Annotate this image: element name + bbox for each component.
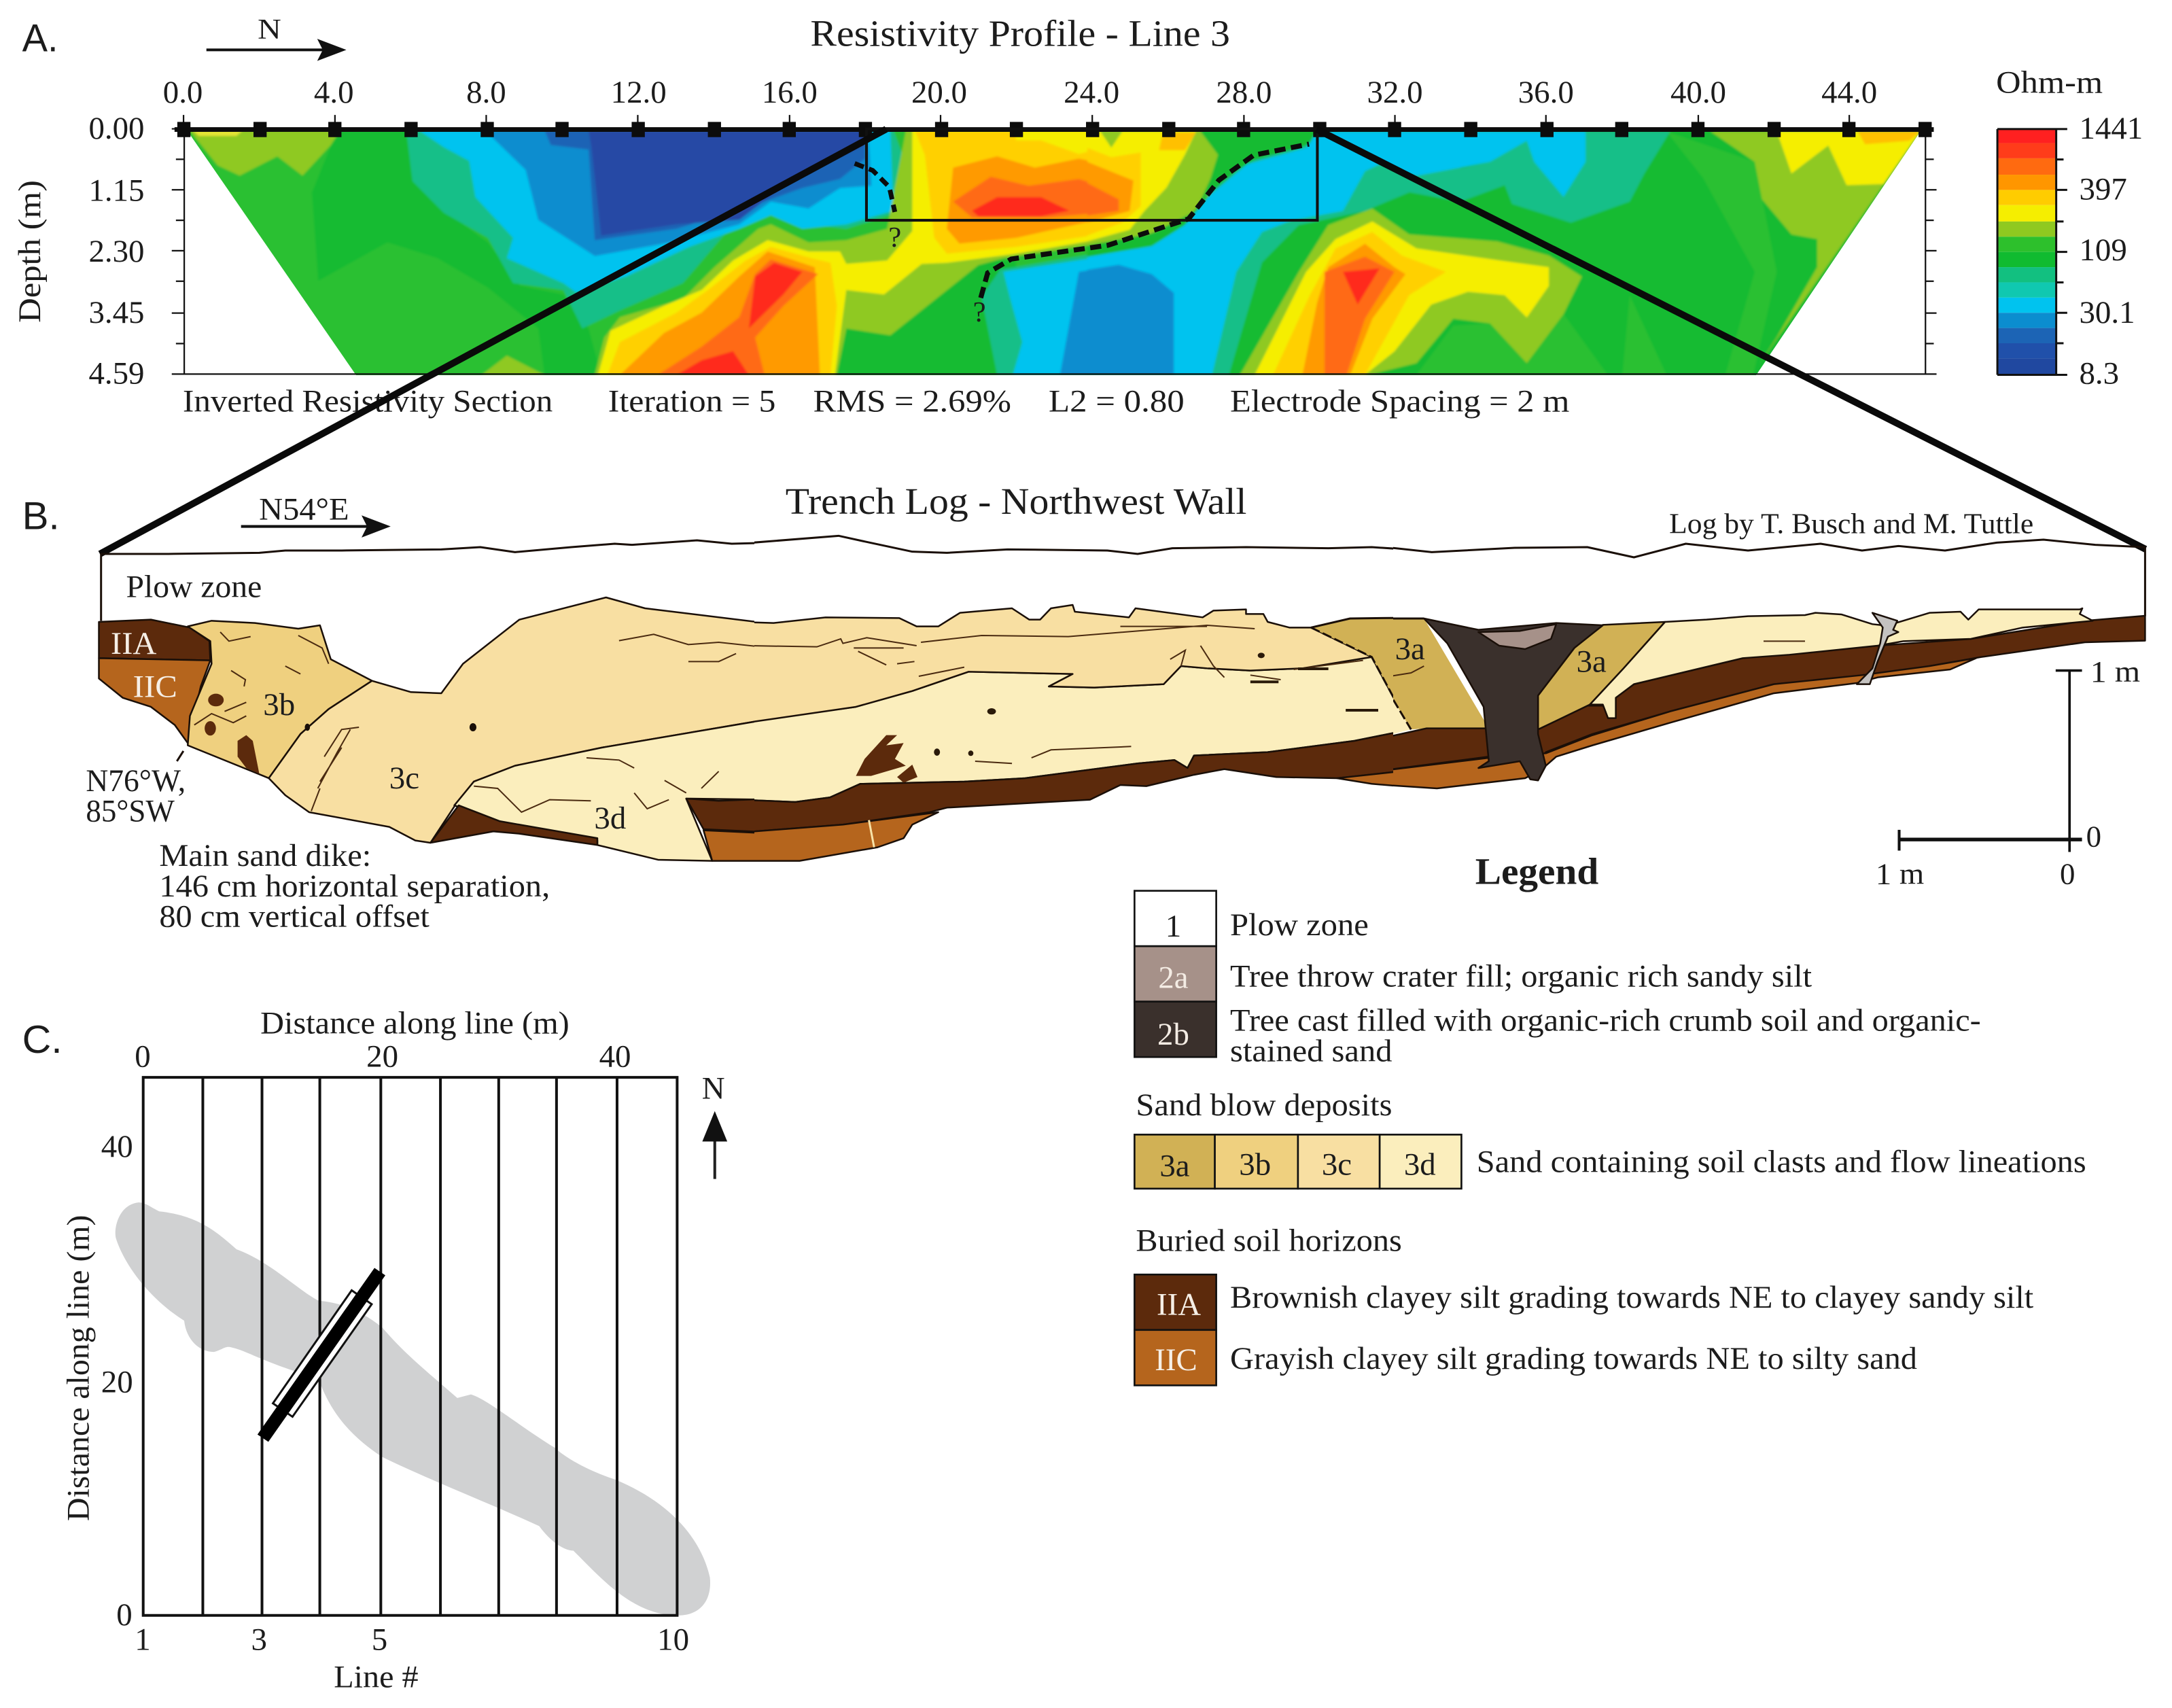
trench log east section with tree cast <box>1349 540 2145 788</box>
panel B text: Trench Log - Northwest Wall <box>786 481 1246 522</box>
panel A text: 4.59 <box>88 356 144 391</box>
legend heading: Legend <box>1475 850 1598 892</box>
panel C text and north arrow: Line # <box>334 1660 419 1695</box>
panel C text and north arrow <box>22 1006 727 1695</box>
panel B text: Plow zone <box>126 570 262 605</box>
panel A: resistivity profile <box>12 12 2143 419</box>
panel A text: L2 = 0.80 <box>1049 383 1185 419</box>
panel B text: Main sand dike: <box>159 838 371 873</box>
panel B text: N76°W, <box>86 763 186 799</box>
legend: buried soil horizons: IIC <box>1155 1342 1197 1378</box>
panel A text: ? <box>973 296 986 328</box>
panel B text: 85°SW <box>86 794 175 829</box>
panel B text: B. <box>22 495 60 538</box>
panel A text: 8.3 <box>2079 356 2119 391</box>
legend: sand blow deposits: 3b <box>1239 1147 1271 1182</box>
panel B: trench log <box>22 481 2145 935</box>
legend: sand blow deposits: 3d <box>1404 1147 1436 1182</box>
panel C text and north arrow: 20 <box>101 1364 133 1399</box>
legend: sand blow deposits <box>1134 1087 2086 1189</box>
panel A text: 4.0 <box>314 75 354 110</box>
legend text: plow zone and tree units: 2a <box>1158 960 1189 995</box>
panel A text: 0.00 <box>88 111 144 146</box>
panel C text and north arrow: 10 <box>657 1622 689 1658</box>
legend: sand blow deposits: 3a <box>1159 1149 1190 1184</box>
panel A text: 12.0 <box>611 75 667 110</box>
panel B text: N54°E <box>259 491 349 527</box>
legend text: plow zone and tree units: Tree throw crater fill; organic rich sandy silt <box>1230 958 1812 994</box>
panel C text and north arrow: 3 <box>251 1622 267 1658</box>
legend swatches: plow zone and tree units <box>1134 891 1216 1057</box>
panel A text: 36.0 <box>1518 75 1574 110</box>
panel A text: Electrode Spacing = 2 m <box>1230 383 1569 419</box>
panel B text: 3b <box>263 687 295 722</box>
panel B text: 80 cm vertical offset <box>159 899 430 935</box>
panel A text: Ohm-m <box>1996 65 2103 101</box>
panel B text: 1 m <box>2090 655 2140 689</box>
panel A text: ? <box>888 222 901 254</box>
panel A text: RMS = 2.69% <box>813 383 1011 419</box>
legend: buried soil horizons: IIA <box>1157 1287 1201 1322</box>
legend: sand blow deposits: Sand containing soil clasts and flow lineations <box>1477 1144 2086 1179</box>
legend text: plow zone and tree units <box>1157 907 1981 1068</box>
resistivity contour section <box>190 132 1919 375</box>
panel A text: 30.1 <box>2079 295 2135 330</box>
panel A text: Iteration = 5 <box>608 383 775 419</box>
panel B text <box>22 481 2140 935</box>
legend: sand blow deposits: 3c <box>1322 1147 1352 1182</box>
panel C text and north arrow: Distance along line (m) <box>260 1006 570 1041</box>
panel A text: 44.0 <box>1821 75 1877 110</box>
panel A text: 16.0 <box>762 75 818 110</box>
panel C text and north arrow: N <box>702 1070 725 1106</box>
panel A text: 40.0 <box>1670 75 1726 110</box>
panel A text: Resistivity Profile - Line 3 <box>810 12 1230 54</box>
panel C text and north arrow: 5 <box>372 1622 387 1658</box>
legend text: plow zone and tree units: Plow zone <box>1230 907 1369 943</box>
colour scale bar <box>1997 129 2067 375</box>
panel C text and north arrow: 0 <box>116 1597 133 1633</box>
panel A text: 397 <box>2079 172 2127 207</box>
legend text: plow zone and tree units: stained sand <box>1230 1033 1392 1068</box>
panel B text: 0 <box>2060 856 2075 890</box>
panel C text and north arrow: 40 <box>599 1039 631 1074</box>
panel B text: 146 cm horizontal separation, <box>159 869 550 904</box>
panel A text: N <box>258 14 281 46</box>
panel B text: 3a <box>1577 644 1607 680</box>
scale bars <box>1899 671 2082 852</box>
trench log west section <box>99 540 775 861</box>
panel C text and north arrow: 0 <box>135 1039 151 1074</box>
legend text: plow zone and tree units: 2b <box>1157 1017 1189 1052</box>
panel B text: Log by T. Busch and M. Tuttle <box>1669 508 2033 540</box>
panel B text: 1 m <box>1876 856 1924 890</box>
panel B text: 3d <box>594 801 626 836</box>
panel C text and north arrow: Distance along line (m) <box>60 1215 96 1521</box>
panel B text: IIA <box>111 626 156 661</box>
panel A text: 109 <box>2079 232 2127 268</box>
panel A text: 32.0 <box>1367 75 1423 110</box>
panel C: survey grid map <box>22 1006 727 1695</box>
panel A text: A. <box>22 16 58 60</box>
panel B text: 0 <box>2086 819 2101 853</box>
panel B text: IIC <box>133 669 177 704</box>
panel A text <box>12 12 2143 419</box>
panel C text and north arrow: 1 <box>135 1622 151 1658</box>
panel B text: 3a <box>1395 631 1425 667</box>
panel C text and north arrow: C. <box>22 1018 63 1062</box>
panel B text: 3c <box>389 761 419 796</box>
trench log central section <box>739 536 1441 861</box>
panel A text: 1.15 <box>88 173 144 209</box>
panel A text: 0.0 <box>163 75 203 110</box>
trench location box and fault dashes <box>855 129 1317 298</box>
panel A text: 28.0 <box>1216 75 1272 110</box>
panel A text: 3.45 <box>88 295 144 330</box>
panel A text: Depth (m) <box>12 180 48 323</box>
panel C text and north arrow: 40 <box>101 1129 133 1164</box>
survey grid with sand blow outline and trench <box>116 1077 710 1616</box>
axes and electrodes <box>172 115 1937 374</box>
legend text: plow zone and tree units: Tree cast filled with organic-rich crumb soil and organic- <box>1230 1003 1981 1038</box>
legend: buried soil horizons: Grayish clayey silt grading towards NE to silty sand <box>1230 1341 1917 1376</box>
zoom lines connecting panels A and B <box>100 129 2145 554</box>
legend: buried soil horizons: Buried soil horizons <box>1136 1223 1402 1259</box>
panel A text: 8.0 <box>466 75 506 110</box>
legend: sand blow deposits: Sand blow deposits <box>1136 1087 1392 1123</box>
legend <box>1134 850 2086 1385</box>
panel A text: 20.0 <box>911 75 967 110</box>
panel C text and north arrow: 20 <box>366 1039 398 1074</box>
legend: buried soil horizons: Brownish clayey silt grading towards NE to clayey sandy silt <box>1230 1280 2033 1315</box>
legend: buried soil horizons <box>1134 1223 2033 1385</box>
panel A text: 24.0 <box>1064 75 1119 110</box>
legend text: plow zone and tree units: 1 <box>1166 909 1181 944</box>
panel A text: 1441 <box>2079 111 2143 146</box>
panel A text: Inverted Resistivity Section <box>183 383 553 419</box>
panel A text: 2.30 <box>88 234 144 269</box>
